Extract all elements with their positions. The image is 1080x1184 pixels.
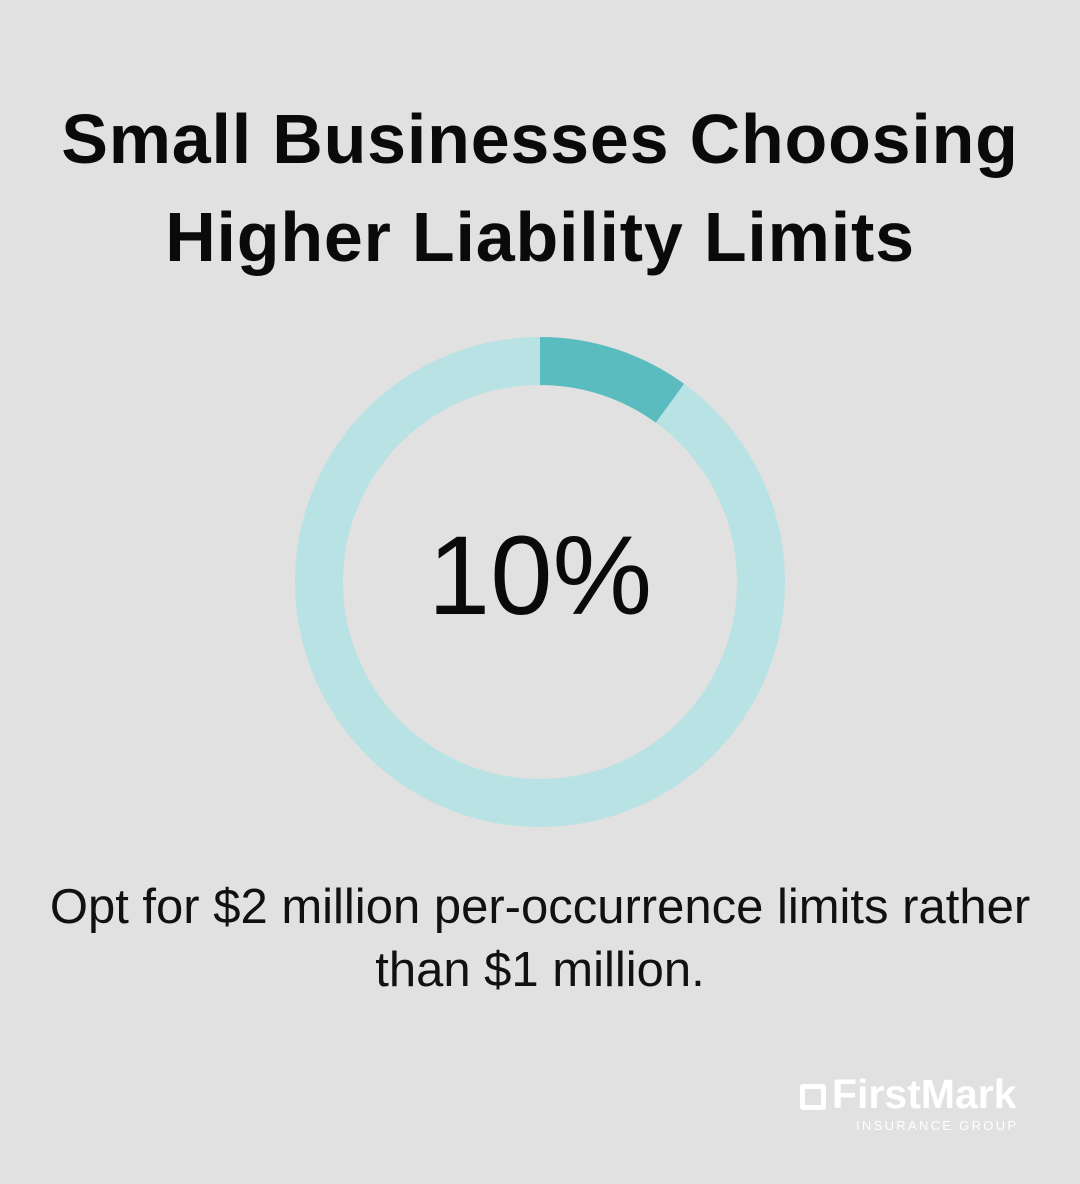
logo: FirstMark <box>832 1071 1017 1117</box>
description: than $1 million. <box>375 943 705 997</box>
description <box>50 880 1030 997</box>
description: Opt for $2 million per-occurrence limits rather <box>50 880 1030 934</box>
donut chart: 10% <box>428 513 652 638</box>
title <box>61 100 1019 276</box>
logo: INSURANCE GROUP <box>856 1118 1018 1133</box>
logo <box>800 1071 1018 1133</box>
title: Higher Liability Limits <box>165 198 915 276</box>
title: Small Businesses Choosing <box>61 100 1019 178</box>
